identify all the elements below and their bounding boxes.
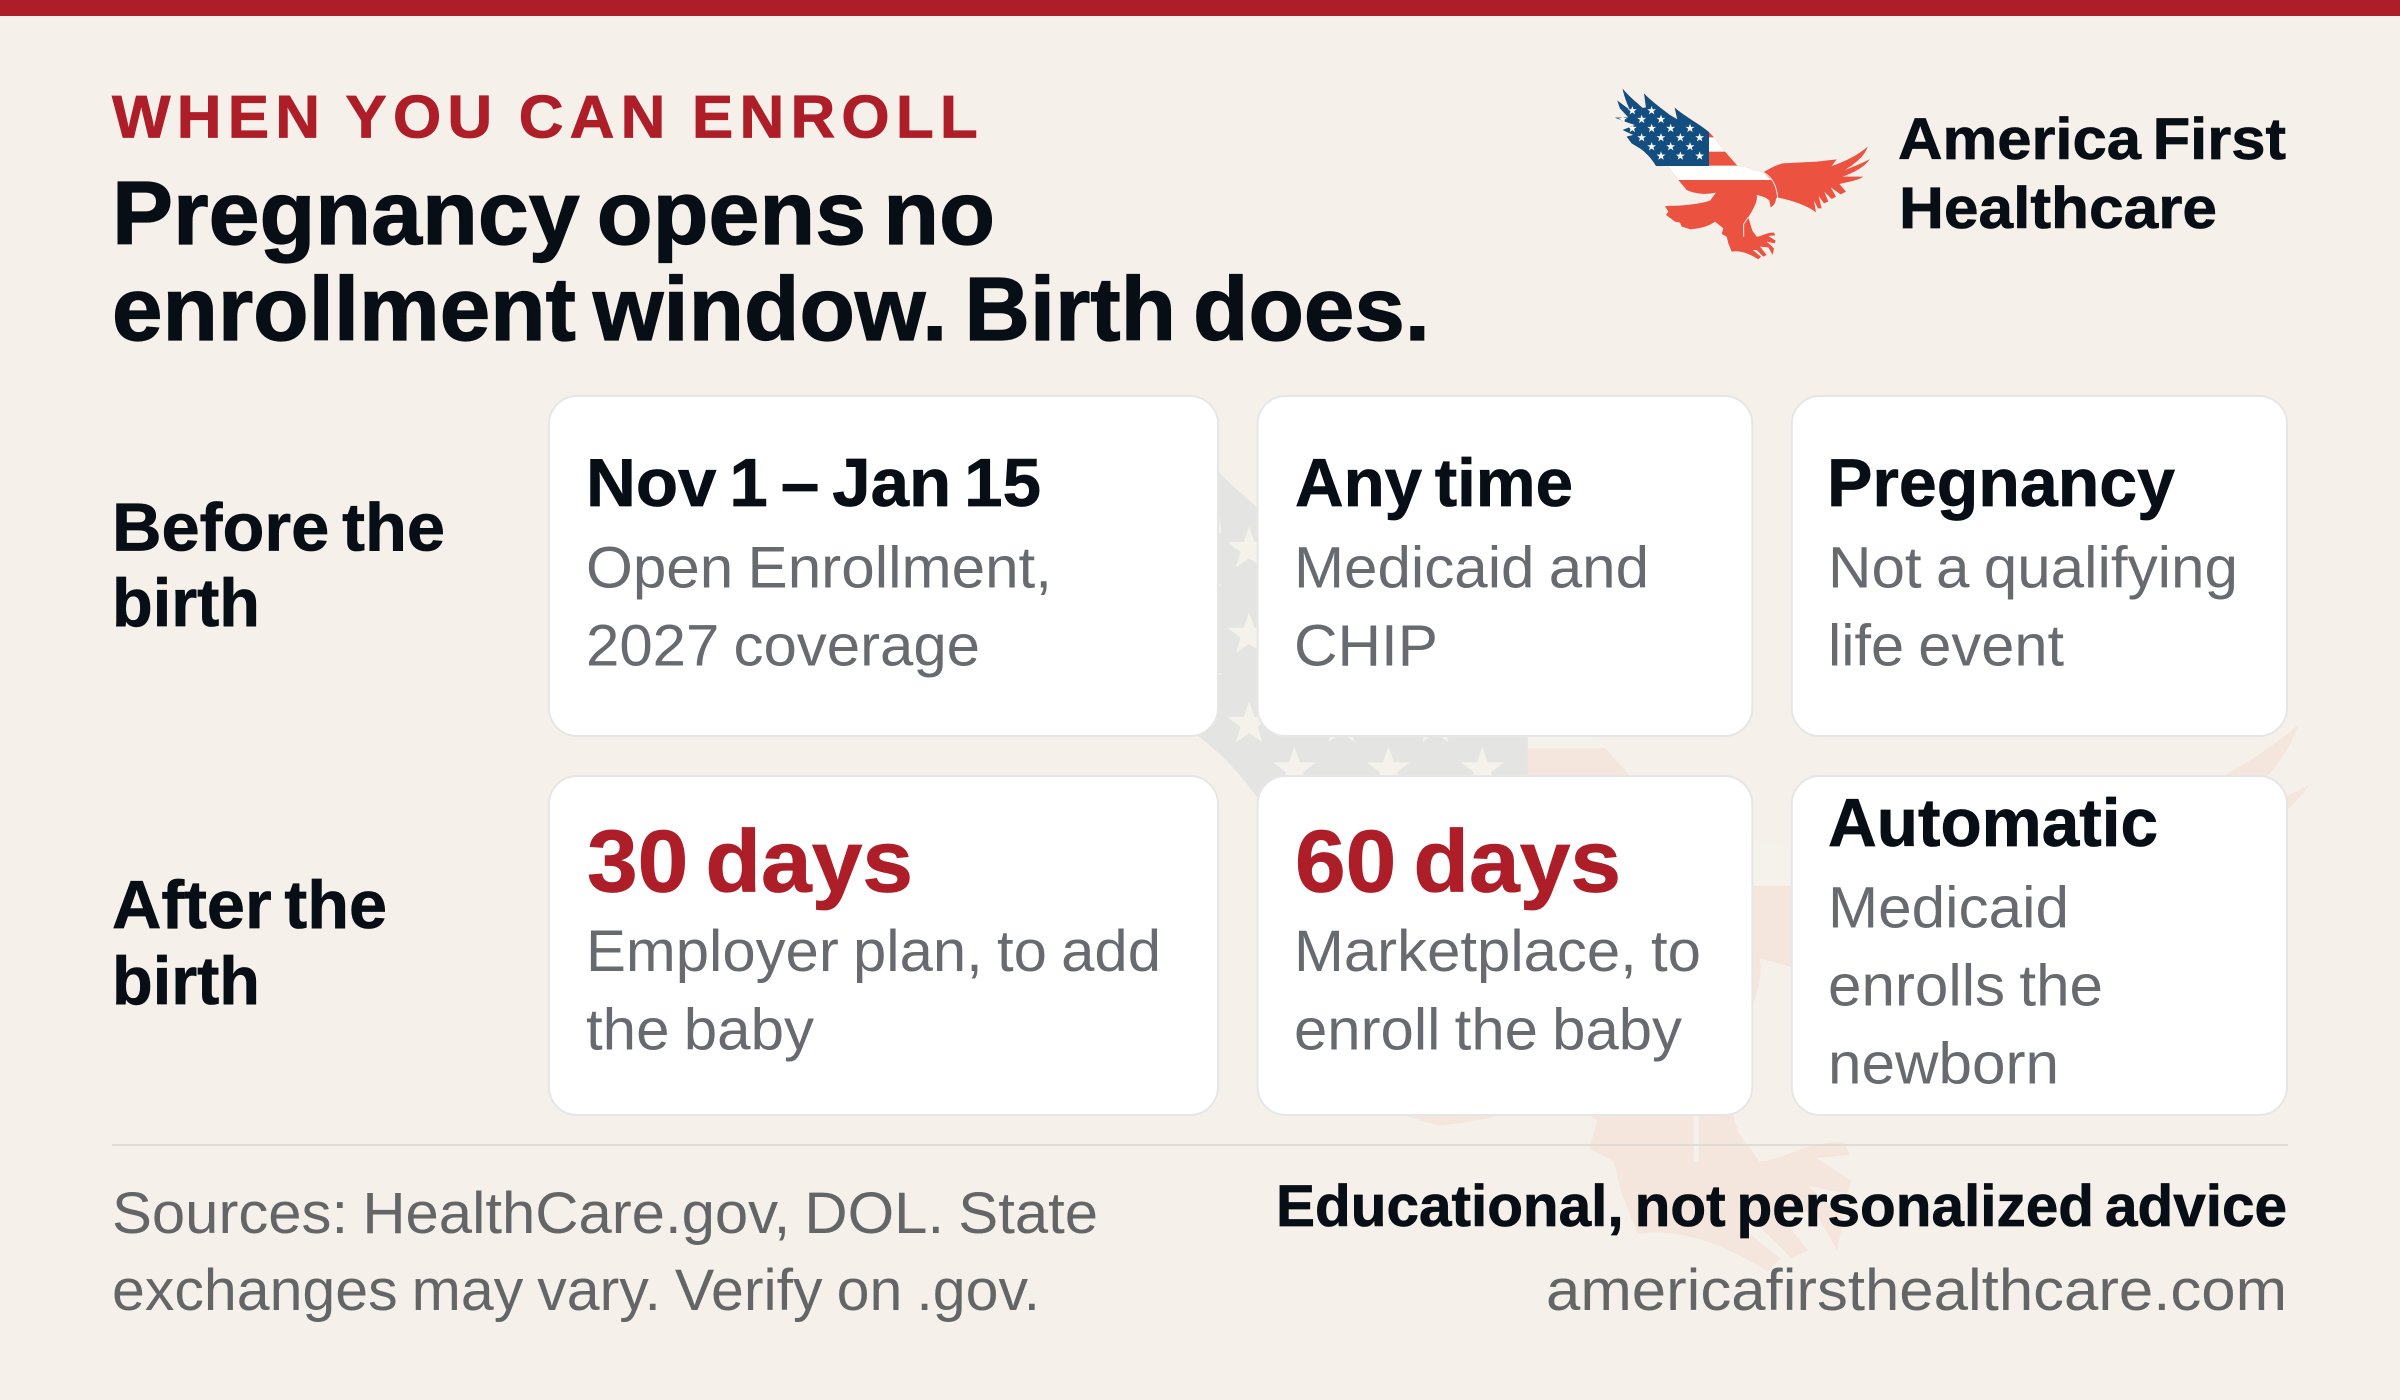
disclaimer: Educational, not personalized advice — [1276, 1174, 2287, 1239]
row label: before the birth: birth — [112, 565, 260, 641]
top accent bar — [0, 0, 2400, 16]
row label: after the birth: After the — [112, 867, 387, 943]
sources note: exchanges may vary. Verify on .gov. — [112, 1258, 1040, 1323]
panel: marketplace: enroll the baby — [1294, 998, 1682, 1062]
panel: marketplace: 60 days — [1295, 812, 1621, 910]
panel: marketplace: Marketplace, to — [1294, 919, 1701, 984]
sources note — [112, 1181, 1098, 1323]
panel: pregnancy: Not a qualifying — [1828, 536, 2238, 600]
panel: medicaid and chip — [1258, 396, 1752, 736]
row label: before the birth: Before the — [112, 490, 445, 566]
logo wordmark — [1898, 107, 2286, 241]
icon: flag eagle — [1600, 80, 1900, 270]
title: enrollment window. Birth does. — [112, 260, 1430, 360]
title — [112, 164, 1430, 360]
row label: before the birth — [112, 490, 445, 641]
panel: medicaid and chip: Medicaid and — [1294, 536, 1649, 600]
panel: marketplace — [1258, 776, 1752, 1115]
watermark: eagle — [998, 400, 2400, 1323]
panel: automatic medicaid: Automatic — [1828, 785, 2158, 861]
panel: pregnancy: Pregnancy — [1827, 445, 2175, 521]
panel: medicaid and chip: Any time — [1295, 445, 1573, 521]
logo — [1600, 80, 2286, 270]
panel: pregnancy — [1792, 396, 2287, 736]
sources note: Sources: HealthCare.gov, DOL. State — [112, 1181, 1098, 1246]
row label: after the birth: birth — [112, 943, 260, 1019]
title: Pregnancy opens no — [112, 164, 995, 264]
panel: open enrollment: Open Enrollment, — [586, 536, 1052, 600]
panel: open enrollment — [549, 396, 1218, 736]
row label: after the birth — [112, 867, 387, 1019]
panel: automatic medicaid: newborn — [1828, 1032, 2059, 1096]
panel: medicaid and chip: CHIP — [1294, 614, 1438, 678]
panel: employer plan: the baby — [586, 998, 814, 1062]
website: americafirsthealthcare.com — [1546, 1258, 2287, 1323]
panel: automatic medicaid: enrolls the — [1828, 954, 2103, 1018]
logo wordmark: Healthcare — [1899, 176, 2217, 241]
panel: employer plan: Employer plan, to add — [586, 919, 1161, 984]
panel: automatic medicaid — [1792, 776, 2287, 1115]
panel: open enrollment: 2027 coverage — [586, 614, 980, 678]
panel: pregnancy: life event — [1828, 614, 2064, 678]
eyebrow heading: WHEN YOU CAN ENROLL — [112, 84, 984, 151]
panel: employer plan: 30 days — [587, 812, 913, 910]
panel: automatic medicaid: Medicaid — [1828, 876, 2069, 940]
panel: employer plan — [549, 776, 1218, 1115]
panel: open enrollment: Nov 1 – Jan 15 — [586, 445, 1041, 521]
logo wordmark: America First — [1898, 107, 2286, 172]
